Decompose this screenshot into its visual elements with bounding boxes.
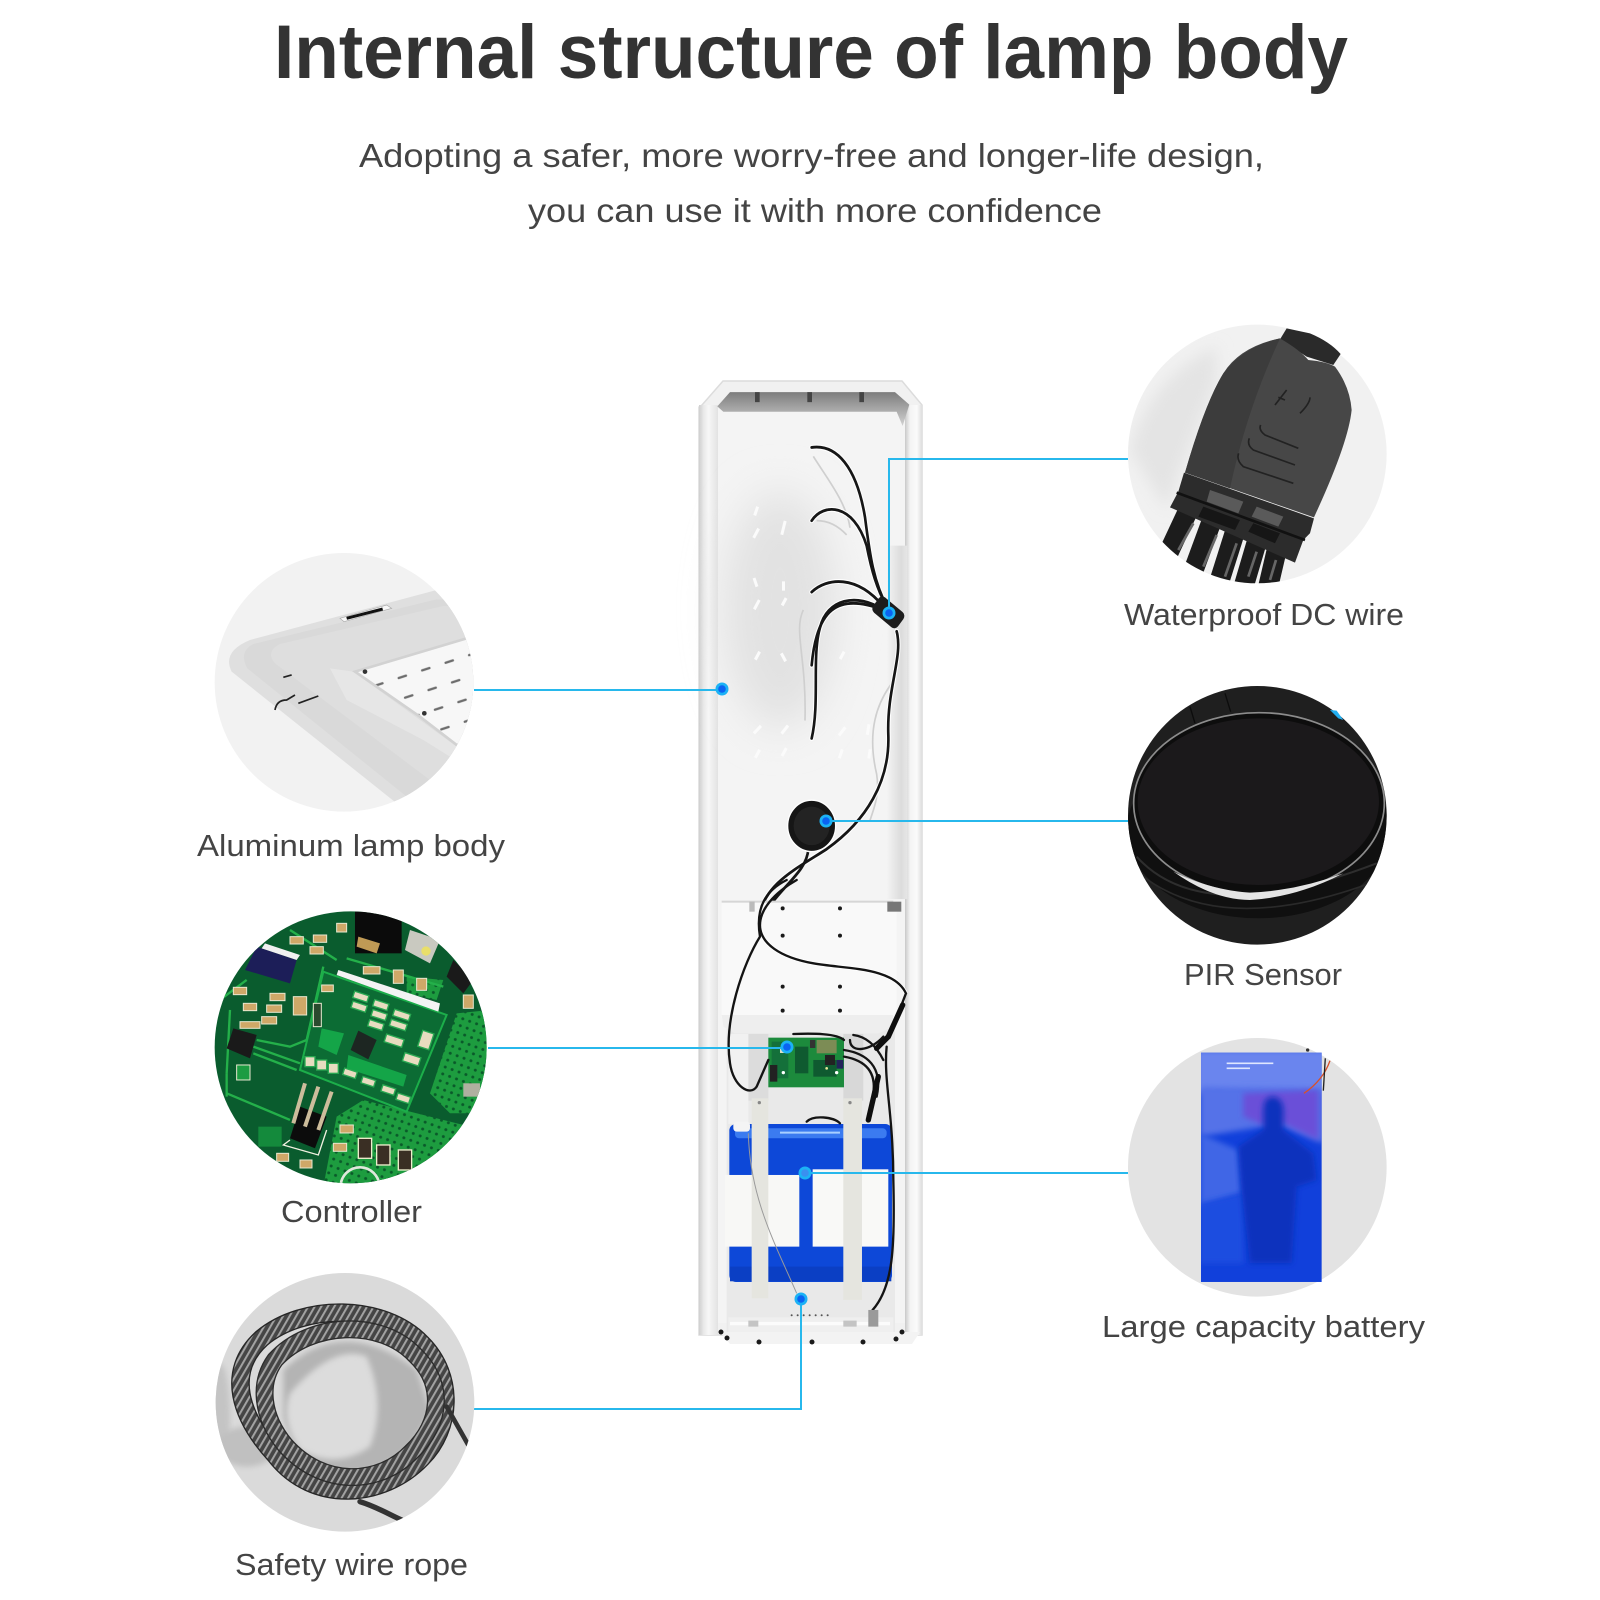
shadow — [1135, 356, 1214, 494]
silver component — [405, 930, 440, 963]
tray holes — [781, 906, 842, 1013]
leader line: controller — [488, 1047, 787, 1049]
leader line: waterproof DC wire — [889, 459, 1128, 613]
title: Internal structure of lamp body — [274, 10, 1348, 95]
marker dot: battery — [798, 1166, 812, 1180]
moulded grooves — [1238, 390, 1310, 483]
left components — [233, 923, 473, 1168]
controller board — [768, 1038, 844, 1087]
panel shading — [723, 492, 837, 728]
top recess band — [717, 392, 909, 426]
left side rail — [699, 405, 718, 1335]
connector body — [1185, 338, 1352, 517]
compartment floor — [727, 1027, 895, 1335]
icon: aluminum lamp body photo — [215, 553, 480, 812]
blue highlight — [1330, 710, 1343, 720]
connector strain relief — [1280, 328, 1341, 365]
blue capacitor — [245, 947, 297, 983]
safety wire — [748, 1133, 797, 1293]
leader line: aluminum lamp body — [474, 689, 722, 691]
traces — [220, 930, 443, 1120]
top switch — [355, 912, 402, 953]
solder pad groups — [305, 991, 434, 1104]
marker dot: DC wire — [882, 606, 896, 620]
marker dot: PIR sensor — [820, 814, 832, 828]
icon: PIR sensor photo — [1127, 686, 1390, 945]
battery leads — [1304, 1061, 1330, 1093]
label: battery: Large capacity battery — [1102, 1309, 1426, 1344]
upper section — [717, 392, 909, 920]
radar module — [300, 972, 447, 1112]
PIR sensor disc — [788, 800, 836, 852]
power transistor — [290, 1107, 327, 1148]
retaining straps — [752, 1098, 768, 1298]
wires — [1167, 507, 1278, 593]
marker dot: controller — [780, 1040, 794, 1054]
lamp outer housing — [699, 381, 922, 1335]
cables — [760, 925, 906, 993]
rope coils — [240, 1313, 468, 1520]
right shadow strip — [887, 546, 907, 899]
label: PIR sensor: PIR Sensor — [1184, 957, 1342, 992]
marker dot: wire rope — [794, 1292, 808, 1306]
icon: battery photo — [1128, 1038, 1387, 1297]
right side rail — [905, 405, 922, 1335]
inner panel — [718, 408, 905, 1323]
lower tray — [722, 902, 897, 1033]
leader line: safety wire rope — [474, 1299, 801, 1409]
icon: controller circuit board photo — [215, 911, 490, 1206]
wire shadows — [800, 456, 893, 821]
label: safety wire rope: Safety wire rope — [235, 1547, 468, 1582]
reflections — [1197, 1050, 1327, 1263]
silhouette reflection — [1238, 1097, 1317, 1263]
black IC — [227, 1028, 257, 1058]
bottom rim — [728, 1317, 893, 1333]
leader line: battery — [805, 1172, 1128, 1174]
panel holes — [752, 506, 872, 759]
waterproof connector — [870, 594, 906, 630]
label: waterproof DC wire: Waterproof DC wire — [1124, 597, 1404, 632]
icon: safety wire rope photo — [210, 1273, 474, 1532]
foam pads — [725, 1175, 799, 1247]
label: aluminum lamp body: Aluminum lamp body — [197, 828, 506, 863]
subtitle — [359, 137, 1264, 229]
locking ribs — [1170, 473, 1314, 563]
subtitle: Adopting a safer, more worry-free and longer-life design, — [359, 137, 1264, 174]
DC wires — [758, 447, 898, 920]
lamp body photo — [699, 381, 922, 1344]
floor shading — [748, 1034, 768, 1101]
lower section — [718, 880, 920, 1344]
icon: waterproof DC wire photo — [1128, 325, 1387, 593]
battery pack — [729, 1124, 892, 1282]
leader line: PIR sensor — [827, 820, 1128, 822]
label: controller: Controller — [281, 1194, 422, 1229]
marker dot: lamp body — [716, 682, 728, 696]
perforated copper areas — [430, 1010, 490, 1113]
subtitle: you can use it with more confidence — [528, 192, 1102, 229]
bottom plate — [720, 1332, 920, 1344]
